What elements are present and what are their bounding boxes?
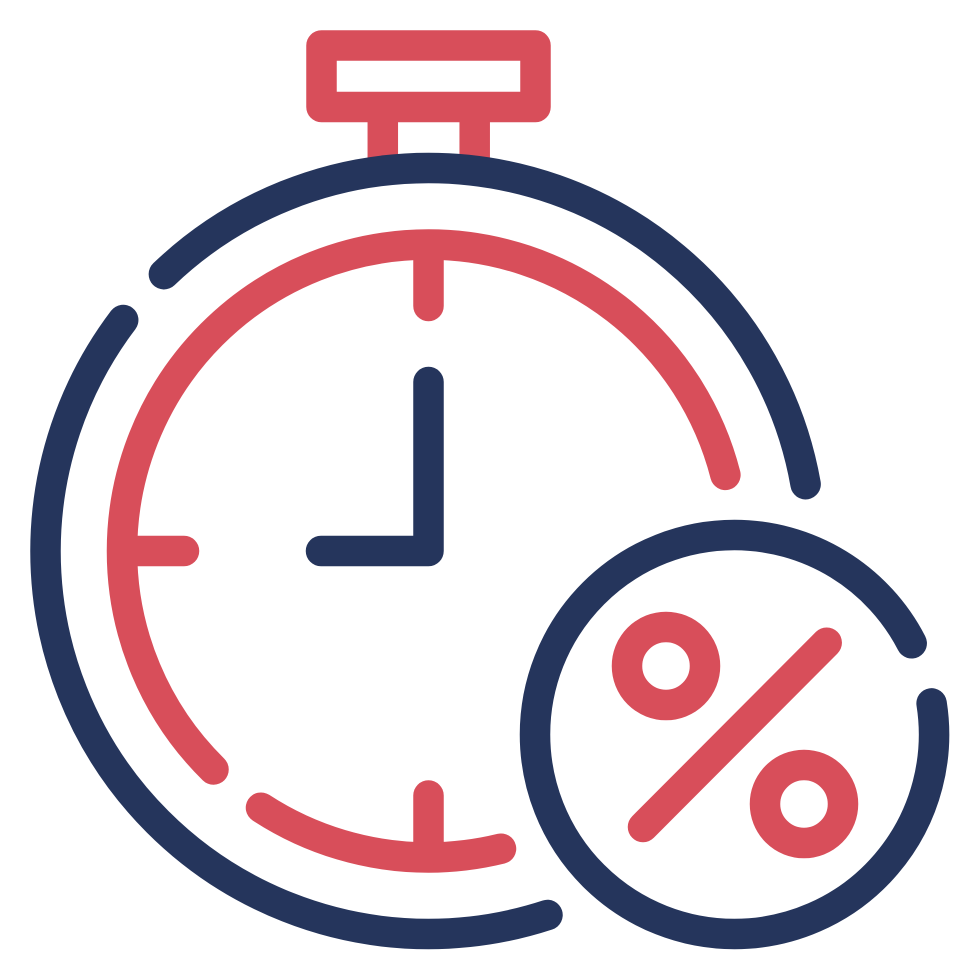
inner red dial arcs — [122, 244, 725, 858]
icon: stopwatch crown button — [322, 46, 536, 165]
clock hands — [321, 382, 428, 551]
dial tick marks — [130, 250, 428, 850]
outer navy case arcs — [46, 168, 806, 934]
percent badge ring — [535, 535, 934, 934]
percent sign — [627, 627, 843, 843]
